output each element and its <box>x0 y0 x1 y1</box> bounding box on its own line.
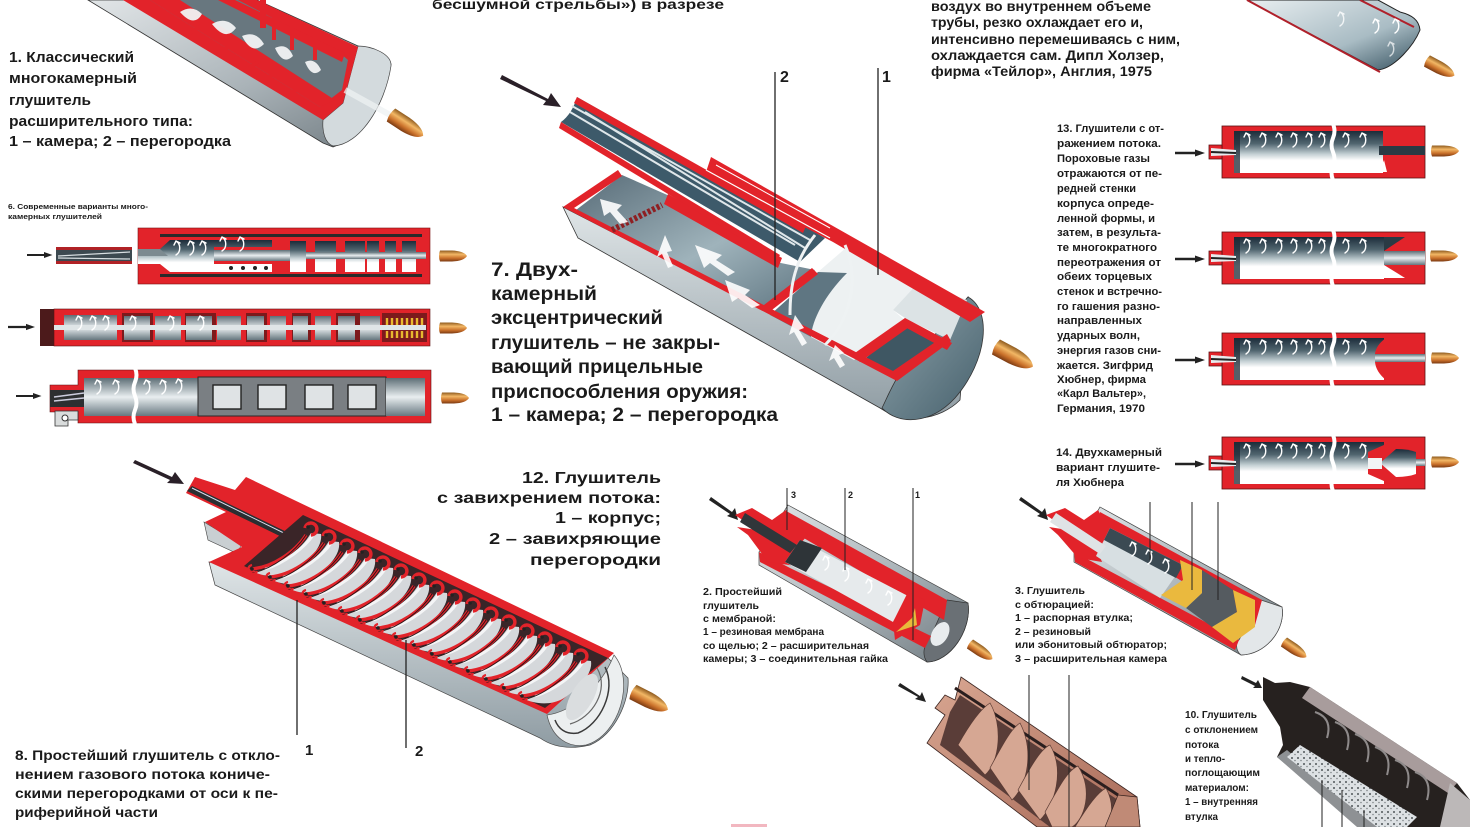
baffles <box>248 523 591 703</box>
figure 6: modern multi-chamber variants <box>8 202 469 426</box>
text: figure 8 caption: 8. Простейший глушитель с откло- <box>15 747 280 763</box>
red upper housing <box>705 157 985 322</box>
end ellipse face <box>882 297 983 420</box>
number labels: 1 <box>882 69 891 86</box>
leader lines <box>787 488 913 640</box>
number labels: 1 <box>305 742 313 759</box>
number labels: 2 <box>848 490 853 500</box>
text: figure 13 description: редней стенки <box>1057 183 1136 195</box>
spiral baffles <box>1315 712 1428 800</box>
number labels <box>305 742 423 760</box>
text: figure 3 caption: или эбонитовый обтюратор; <box>1015 639 1167 651</box>
arrow <box>709 497 738 520</box>
arrow <box>898 683 926 702</box>
variant A <box>27 228 467 284</box>
text: figure 12 caption: 12. Глушитель <box>522 470 661 487</box>
text: figure 2 caption: с мембраной: <box>703 613 776 625</box>
text: figure 10 caption: 1 – внутренняя <box>1185 796 1258 808</box>
figure 13: reflection silencer, variant 3 <box>1175 331 1459 387</box>
figure 13: reflection silencer, variant 1 <box>1175 124 1459 180</box>
end ring <box>547 655 624 746</box>
text: figure 3 caption: 3 – расширительная камера <box>1015 654 1167 665</box>
text: figure 7 caption: камерный <box>491 284 597 305</box>
number labels <box>780 69 891 86</box>
figure 3: obturation silencer <box>1019 497 1309 662</box>
barrel <box>561 97 825 262</box>
chamber <box>244 515 608 708</box>
figure 9: copper-toned silencer <box>898 675 1140 827</box>
text: figure 13 description: энергия газов сни- <box>1057 345 1161 357</box>
chamber <box>785 540 908 622</box>
text: figure 6 caption <box>8 202 149 221</box>
text: figure 2 caption: 1 – резиновая мембрана <box>703 626 824 638</box>
text: figure 13 description: затем, в результа- <box>1057 227 1161 239</box>
text: figure 2 caption <box>703 587 888 665</box>
text: figure 7 caption: 7. Двух- <box>491 260 578 281</box>
text: figure 10 caption: потока <box>1185 739 1219 751</box>
arrow <box>1019 497 1048 520</box>
first chamber <box>576 175 815 310</box>
text: top right description: трубы, резко охлаждает его и, <box>931 15 1143 30</box>
text: figure 13 description: отражаются от пе- <box>1057 168 1162 180</box>
text: figure 13 description: 13. Глушители с от- <box>1057 123 1164 135</box>
arrow <box>1241 676 1262 688</box>
body <box>1263 677 1470 827</box>
text: figure 12 caption <box>437 470 661 569</box>
silver lower body <box>1277 750 1377 827</box>
red partition <box>760 268 818 313</box>
figure 10: heat-absorbing silencer <box>1241 676 1470 827</box>
number labels: 1 <box>915 490 920 500</box>
top dark strip <box>955 688 1118 795</box>
figure 7: eccentric two-chamber silencer <box>500 68 1037 420</box>
arrow <box>133 460 184 484</box>
text: figure 10 caption: втулка <box>1185 811 1218 823</box>
text: figure 1 caption: 1. Классический <box>9 49 134 66</box>
muzzle bore <box>893 283 967 340</box>
silver body <box>759 505 968 662</box>
text: top right description: фирма «Тейлор», Англия, 1975 <box>931 64 1153 79</box>
text: figure 1 caption: многокамерный <box>9 70 137 87</box>
number labels: 2 <box>415 743 423 760</box>
text: figure 2 caption: со щелью; 2 – расширительная <box>703 641 869 652</box>
text: figure 7 caption <box>491 260 778 426</box>
text: figure 14 caption: вариант глушите- <box>1056 462 1160 474</box>
text: figure 7 caption: 1 – камера; 2 – перегородка <box>491 405 778 426</box>
text: figure 2 caption: глушитель <box>703 601 759 612</box>
text: figure 14 caption: 14. Двухкамерный <box>1056 447 1162 459</box>
red section <box>759 512 947 648</box>
variant C <box>16 368 469 426</box>
text: top right description: охлаждается сам. Дипл Холзер, <box>931 48 1164 63</box>
bullet <box>991 339 1037 374</box>
chamber <box>1096 528 1183 598</box>
text: figure 13 description: те многократного <box>1057 242 1157 254</box>
text: figure 8 caption: риферийной части <box>15 804 158 820</box>
text: figure 7 caption: вающий прицельные <box>491 357 703 378</box>
silver top band <box>1302 687 1457 793</box>
text: figure 13 description: корпуса опреде- <box>1057 198 1154 210</box>
end ellipse <box>1237 600 1282 655</box>
text: figure 10 caption: с отклонением <box>1185 724 1258 736</box>
silver body <box>209 562 628 747</box>
bullet <box>1280 637 1309 662</box>
text: figure 7 caption: глушитель – не закры- <box>491 333 720 354</box>
text: top right description <box>931 0 1180 79</box>
third chamber <box>861 323 947 377</box>
text: figure 6 caption: камерных глушителей <box>8 212 102 221</box>
number labels: 3 <box>791 490 796 500</box>
text: figure 13 description: Хюбнер, фирма <box>1057 374 1147 386</box>
flange <box>204 522 242 553</box>
bullet <box>628 684 672 717</box>
text: figure 13 description: Германия, 1970 <box>1057 403 1145 415</box>
bullet <box>386 108 427 142</box>
red section <box>1074 512 1262 650</box>
text: figure 13 description: «Карл Вальтер», <box>1057 388 1146 400</box>
figure 11: open cooling tube, top right <box>1247 0 1457 81</box>
text: figure 3 caption: 1 – распорная втулка; <box>1015 613 1133 624</box>
text: figure 13 description: ударных волн, <box>1057 330 1140 342</box>
text: figure 10 caption: материалом: <box>1185 782 1249 794</box>
silver outer body <box>563 207 968 418</box>
red section plane <box>186 477 614 714</box>
text: figure 8 caption <box>15 747 280 820</box>
text: figure 7 caption: эксцентрический <box>491 308 663 329</box>
leader lines <box>775 68 878 300</box>
text: figure 12 caption: 1 – корпус; <box>555 510 661 527</box>
text: figure 3 caption: 2 – резиновый <box>1015 627 1091 638</box>
text: figure 13 description: ленной формы, и <box>1057 213 1155 225</box>
text: figure 8 caption: нением газового потока кониче- <box>15 766 270 782</box>
bottom pink mark <box>731 824 767 827</box>
text: figure 1 caption <box>9 49 232 150</box>
figure 13: reflection silencer, variant 2 <box>1175 230 1458 286</box>
text: figure 10 caption: 10. Глушитель <box>1185 709 1258 721</box>
text: figure 12 caption: перегородки <box>530 552 661 569</box>
end ellipse <box>924 600 968 662</box>
connecting nut <box>1046 508 1112 562</box>
mesh <box>612 205 662 230</box>
text: figure 13 description: направленных <box>1057 315 1143 327</box>
bullet <box>966 639 995 664</box>
absorbing material <box>1287 745 1417 827</box>
text: figure 1 caption: расширительного типа: <box>9 113 193 130</box>
text: figure 2 caption: камеры; 3 – соединительная гайка <box>703 654 888 665</box>
variant B <box>8 309 467 346</box>
text: figure 6 caption: 6. Современные варианты много- <box>8 202 149 211</box>
text: figure 13 description: ражением потока. <box>1057 138 1161 150</box>
text: figure 13 description: жается. Зигфрид <box>1056 360 1153 372</box>
bullet <box>1423 55 1457 81</box>
text: figure 14 caption: ля Хюбнера <box>1056 477 1125 489</box>
yellow obturators <box>1161 560 1202 608</box>
text: figure 13 description: переотражения от <box>1057 257 1162 269</box>
interior <box>940 695 1118 827</box>
leader lines <box>1150 502 1218 600</box>
figure 12: swirl-flow silencer <box>133 460 672 760</box>
text: figure 7 caption: приспособления оружия: <box>491 382 748 403</box>
text: figure 13 description: стенок и встречно- <box>1057 286 1162 298</box>
text: figure 10 caption <box>1185 709 1260 823</box>
text: figure 13 description: обеих торцевых <box>1057 271 1153 283</box>
text: figure 13 description: го гашения разно- <box>1057 301 1160 313</box>
text: figure 13 description <box>1056 123 1164 415</box>
number labels <box>791 490 920 500</box>
second chamber <box>770 247 918 360</box>
connecting nut <box>735 508 808 566</box>
silver body <box>1074 507 1282 655</box>
text: figure 10 caption: и тепло- <box>1185 753 1225 765</box>
text: figure 8 caption: скими перегородками от оси к пе- <box>15 785 278 801</box>
text: figure 14 caption <box>1056 447 1162 489</box>
figure 2: membrane silencer <box>709 488 995 664</box>
end face <box>1440 783 1470 827</box>
text: figure 12 caption: 2 – завихряющие <box>489 531 661 548</box>
barrel <box>187 486 295 541</box>
text: figure 12 caption: с завихрением потока: <box>437 490 661 507</box>
number labels: 2 <box>780 69 789 86</box>
arrow <box>500 75 561 107</box>
membrane <box>893 592 925 640</box>
red rim lower <box>563 170 951 381</box>
text: figure 3 caption: с обтюрацией: <box>1015 599 1094 611</box>
leader lines <box>1029 675 1069 827</box>
mechanism between obturators <box>1186 570 1237 627</box>
text: figure 1 caption: 1 – камера; 2 – перегородка <box>9 133 232 150</box>
text: figure 2 caption: 2. Простейший <box>703 587 782 598</box>
end face <box>1105 795 1140 827</box>
text: figure 10 caption: поглощающим <box>1185 767 1260 779</box>
text: top right description: интенсивно перемешиваясь с ним, <box>931 32 1180 47</box>
figure 14: two-chamber Hübner variant <box>1175 435 1459 491</box>
leader lines <box>1322 780 1364 827</box>
body <box>927 677 1140 827</box>
airflow arrows <box>600 199 845 368</box>
text: figure 3 caption: 3. Глушитель <box>1015 586 1085 597</box>
text: figure 1 caption: глушитель <box>9 92 91 109</box>
leader lines <box>297 600 406 748</box>
text: figure 3 caption <box>1015 586 1167 665</box>
text: figure 13 description: Пороховые газы <box>1057 153 1150 165</box>
blades <box>958 703 1112 827</box>
figure 1: classic multi-chamber silencer <box>88 0 427 147</box>
